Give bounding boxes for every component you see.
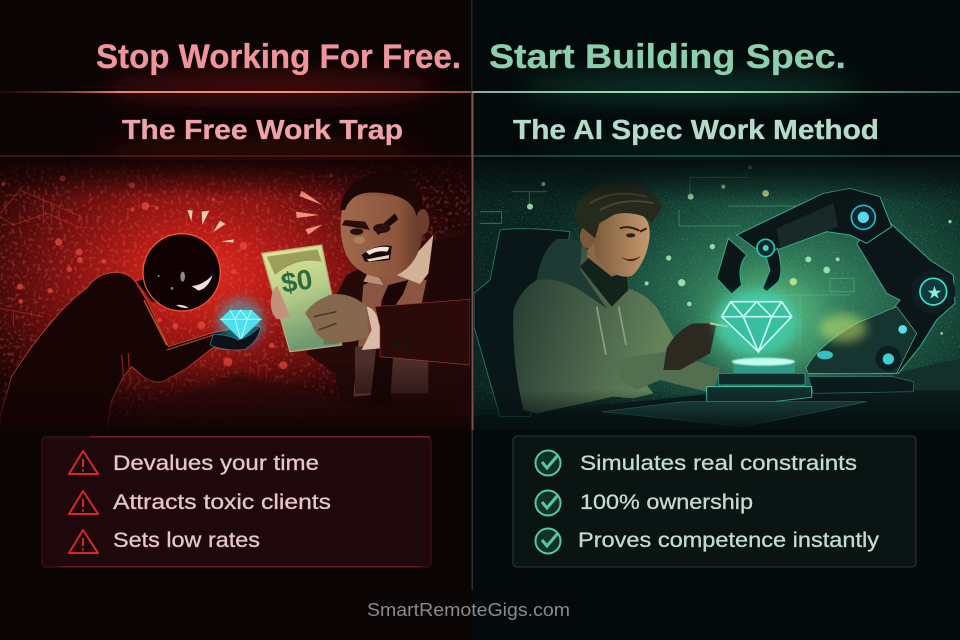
angry client [307,172,470,413]
red speckle particles [1,173,333,369]
dark ground [100,373,470,430]
zero dollar bill: $0 [279,263,315,299]
icon: check circle 1 [536,450,560,476]
icon: star on robot joint: ★ [927,282,942,302]
list item: ownership: 100% ownership [580,490,753,514]
central glow [703,277,830,377]
icon: warning triangle 2 [69,491,98,514]
panel: free work drawbacks [42,436,431,568]
yellow-green glow on robot [820,314,867,342]
list item: devalues: Devalues your time [113,451,319,475]
panel: free work trap illustration [0,160,470,430]
background circuit lines [480,177,854,347]
list item: proves: Proves competence instantly [578,528,879,552]
icon: check circle 3 [536,528,560,554]
header divider lines [0,91,960,156]
icon: check circle 2 [536,490,560,516]
smiling developer [513,183,728,413]
icon: holographic diamond [715,290,798,362]
client hands [271,286,470,365]
panel: AI spec work illustration [474,160,960,427]
blueprint on desk [602,402,867,427]
list item: simulates: Simulates real constraints [580,451,857,475]
list item: attracts: Attracts toxic clients [113,490,331,514]
office chair [474,229,570,417]
center divider [471,0,474,590]
shock marks near worker [187,210,234,243]
title: start building: Start Building Spec. [489,38,846,76]
shock marks near client [296,191,323,235]
desk [474,387,960,430]
panel: spec work benefits [513,436,916,567]
background wireframe buildings [0,190,267,387]
title: stop working: Stop Working For Free. [96,38,461,76]
robot arm [717,188,955,393]
footer website: SmartRemoteGigs.com [367,600,570,620]
heading: AI spec work method: The AI Spec Work Method [513,114,879,145]
list item: low rates: Sets low rates [113,528,260,552]
icon: glowing gem in hand [210,298,264,350]
zero dollar bill [262,245,342,352]
glowing particles [527,165,952,335]
icon: warning triangle 3 [69,530,98,553]
icon: warning triangle 1 [69,451,98,474]
stacked server plates [707,358,812,402]
heading: free work trap: The Free Work Trap [122,114,403,145]
worker silhouette [0,234,261,430]
